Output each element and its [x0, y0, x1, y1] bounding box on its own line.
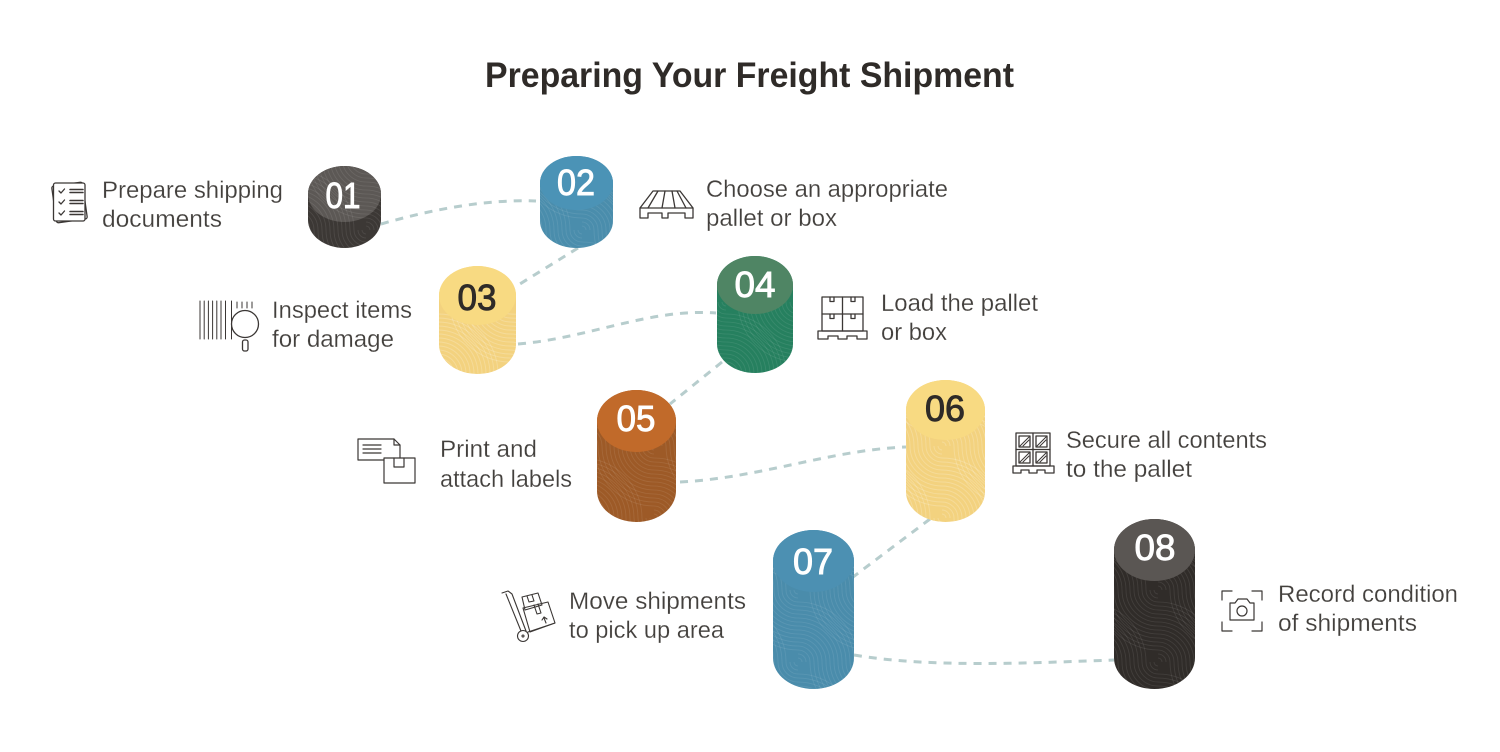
label 05: attach labels [440, 466, 572, 493]
cylinder 05 [597, 390, 676, 522]
step 05 [358, 390, 676, 522]
label 05: Print and [440, 436, 537, 463]
step 01 [52, 166, 381, 248]
step 07 [502, 530, 854, 689]
label 06: to the pallet [1066, 456, 1192, 483]
cylinder 02 [540, 156, 613, 248]
number 05: 05 [616, 398, 656, 439]
icon: barcode with magnifier [200, 301, 258, 351]
label 02 [706, 176, 948, 232]
label 08 [1278, 581, 1458, 637]
number 01: 01 [326, 175, 360, 216]
label 07 [569, 588, 746, 644]
step 08 [1114, 519, 1458, 689]
icon: hand truck with boxes [502, 591, 555, 642]
step 02 [540, 156, 948, 248]
label 08: Record condition [1278, 581, 1458, 608]
label 04: Load the pallet [881, 290, 1038, 317]
label 02: Choose an appropriate [706, 176, 948, 203]
label 05 [440, 436, 572, 493]
cylinder 03 [439, 266, 516, 374]
number 07: 07 [793, 541, 833, 582]
number 03: 03 [458, 277, 496, 318]
icon: label and box [358, 439, 415, 483]
step 06 [906, 380, 1267, 522]
label 01 [102, 177, 283, 233]
icon: boxes on pallet [818, 297, 867, 339]
label 02: pallet or box [706, 205, 837, 232]
number 06: 06 [925, 388, 965, 429]
step 04 [717, 256, 1038, 373]
number 08: 08 [1134, 527, 1176, 568]
label 04 [881, 290, 1038, 346]
label 06 [1066, 427, 1267, 483]
title: Preparing Your Freight Shipment [485, 56, 1014, 95]
icon: camera in viewfinder [1222, 591, 1262, 631]
label 01: documents [102, 206, 222, 233]
label 08: of shipments [1278, 610, 1417, 637]
icon: pallet [640, 191, 693, 218]
label 01: Prepare shipping [102, 177, 283, 204]
cylinder 08 [1114, 519, 1195, 689]
step 03 [200, 266, 516, 374]
label 03: for damage [272, 326, 394, 353]
label 06: Secure all contents [1066, 427, 1267, 454]
number 02: 02 [557, 162, 595, 203]
label 03 [272, 297, 412, 353]
icon: secured pallet [1013, 433, 1054, 473]
cylinder 07 [773, 530, 854, 689]
label 07: to pick up area [569, 617, 725, 644]
dashed connectors between steps [381, 201, 1114, 664]
cylinder 04 [717, 256, 793, 373]
cylinder 06 [906, 380, 985, 522]
label 03: Inspect items [272, 297, 412, 324]
label 04: or box [881, 319, 947, 346]
label 07: Move shipments [569, 588, 746, 615]
number 04: 04 [734, 264, 776, 305]
cylinder 01 [308, 166, 381, 248]
icon: checklist documents [52, 182, 87, 223]
